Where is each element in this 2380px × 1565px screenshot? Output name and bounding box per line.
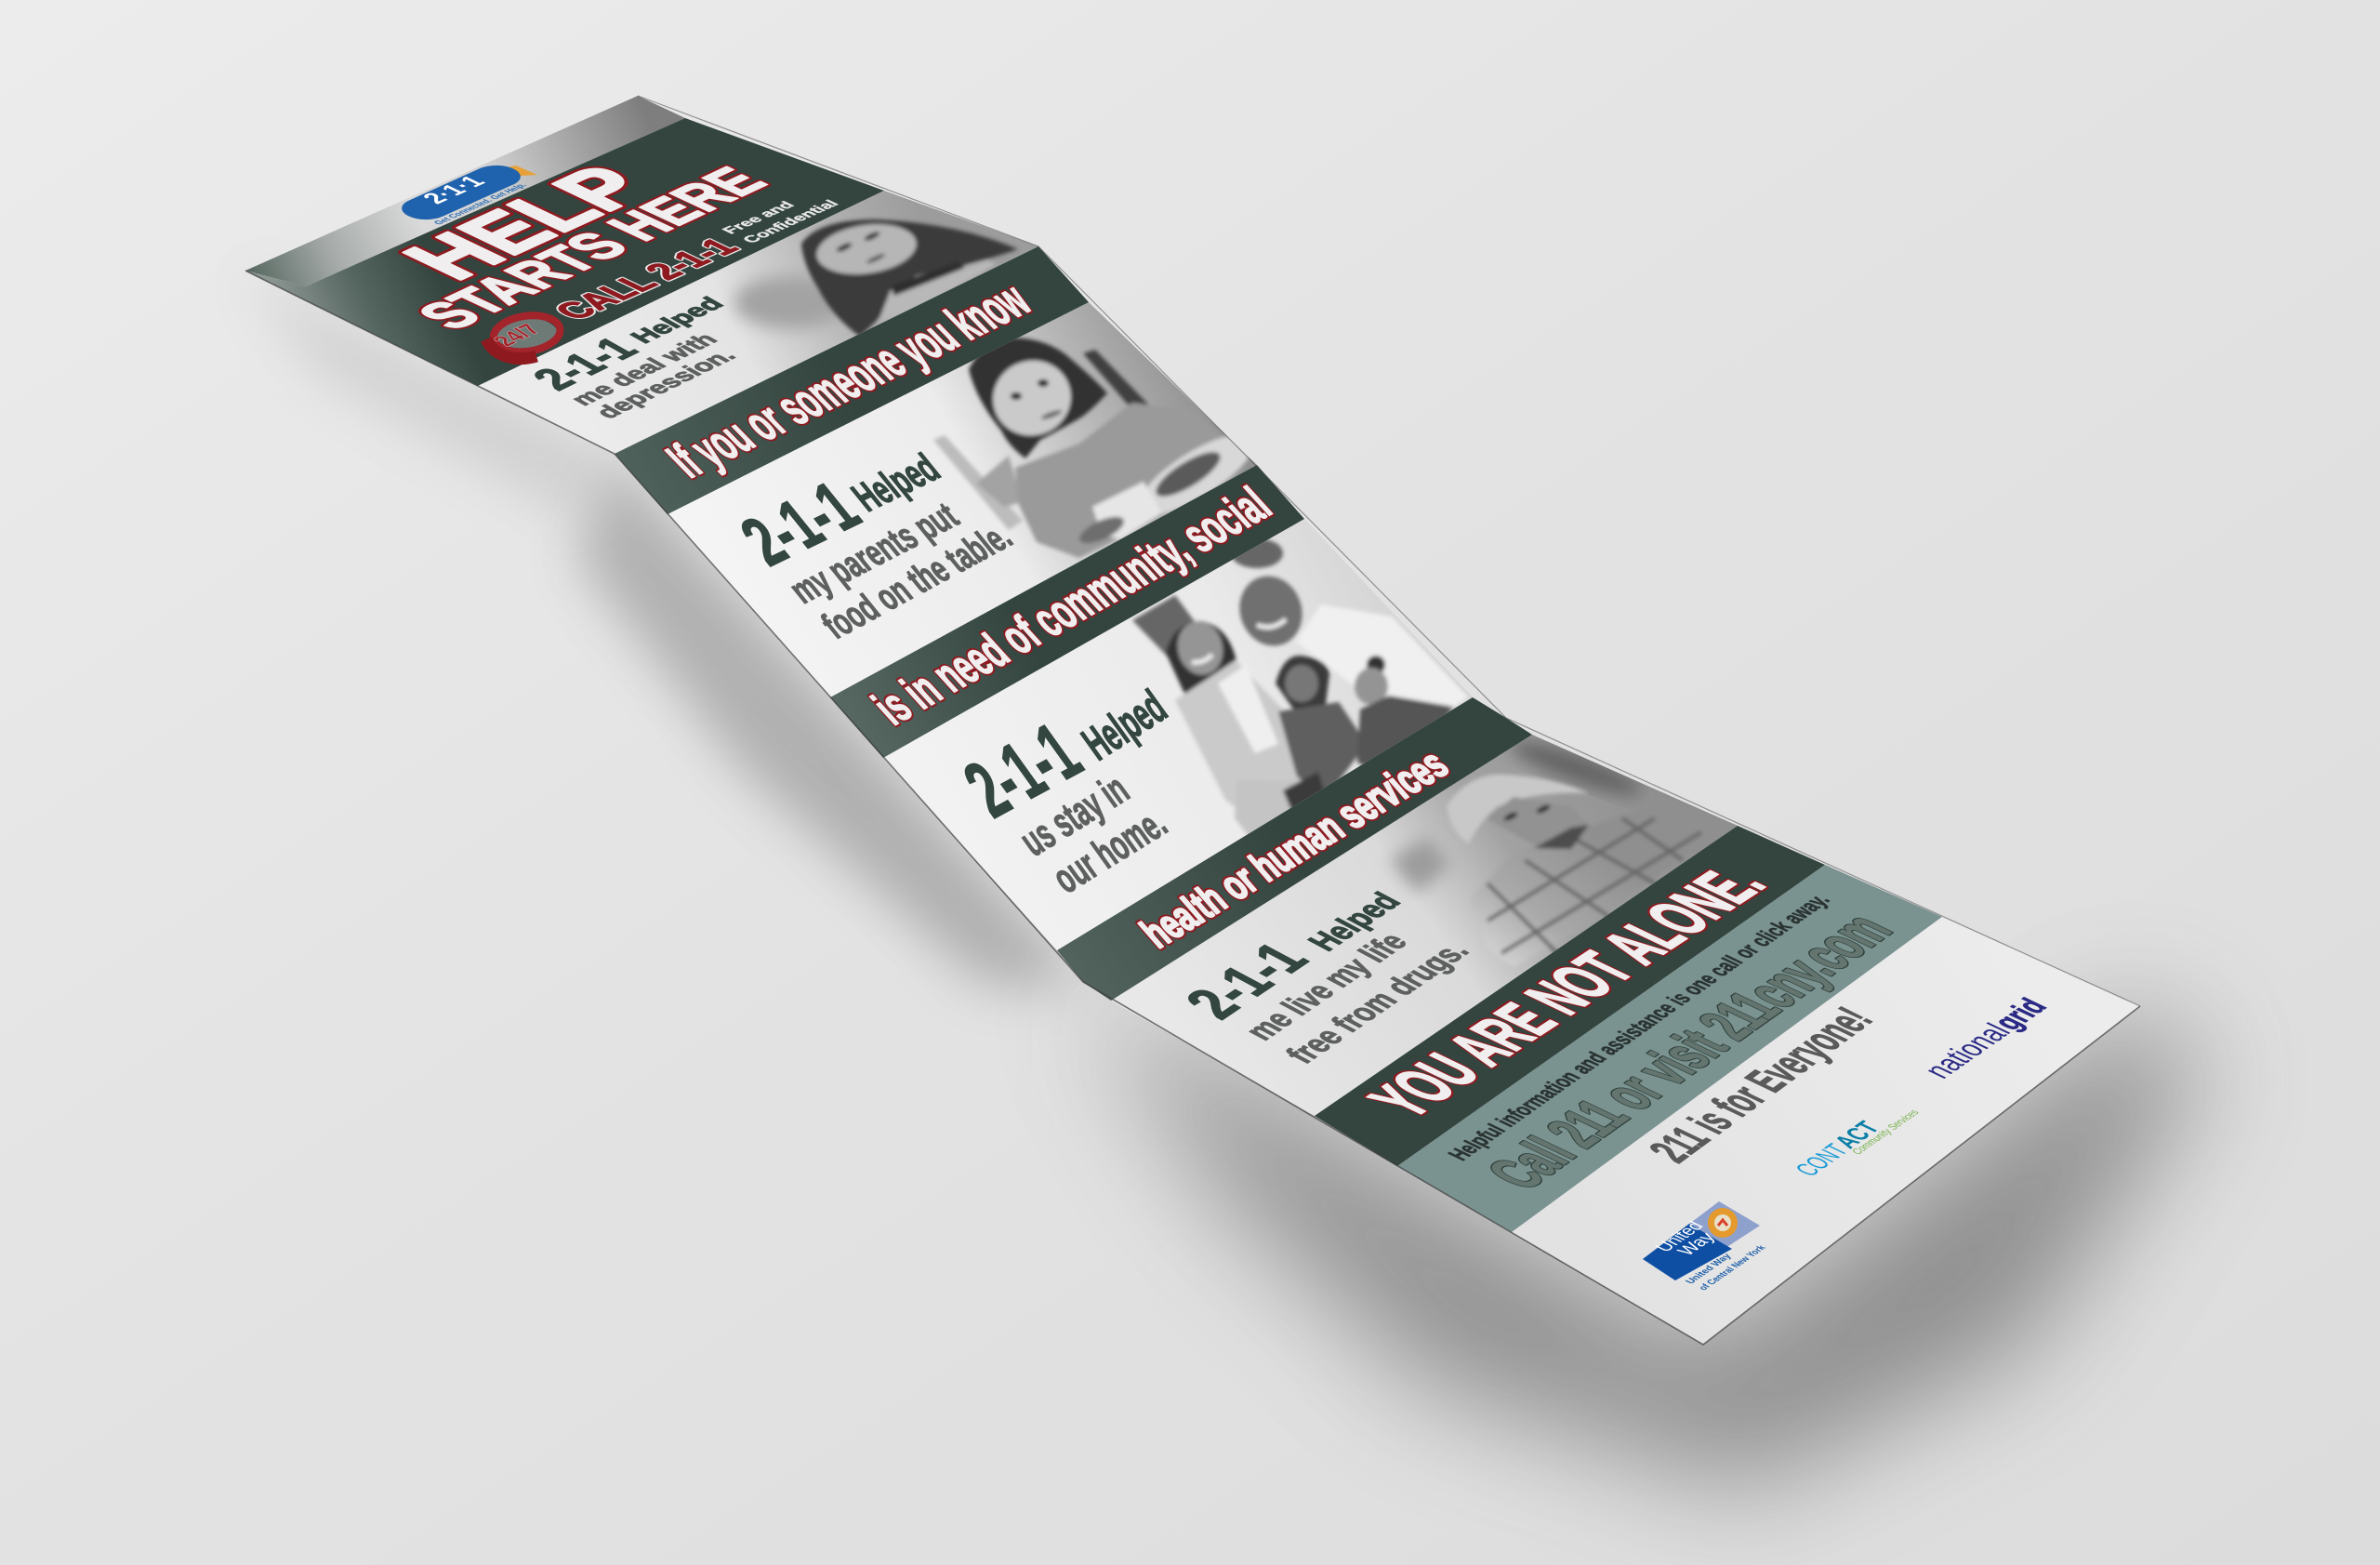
panel: photo section 4, man: [1111, 732, 1748, 1116]
panel: teal section: [1397, 865, 1942, 1232]
panel: band 2: [830, 465, 1304, 758]
heading: HELP: HELP: [381, 154, 672, 290]
folded brochure: [245, 96, 2140, 1345]
text: helped home: our home.: [1044, 799, 1175, 902]
text: 211 is for everyone: 211 is for Everyone!: [1638, 1001, 1884, 1169]
text: is in need of community, social: is in need of community, social: [862, 477, 1283, 736]
text: helped drugs: [1170, 888, 1477, 1068]
logo: national grid: grid: [1985, 994, 2055, 1034]
text: is in need of community, social: [862, 477, 1283, 736]
paper shadows: [245, 271, 2203, 1488]
panel: logo 2-1-1: Get Connected. Get Help.: [432, 182, 530, 226]
panel: band 4: [1315, 826, 1825, 1166]
text: helped depression: depression.: [589, 346, 742, 422]
logo: united way: of Central New York: [1697, 1244, 1769, 1292]
text: health or human services: health or human services: [1129, 742, 1460, 955]
heading: HELP: HELP: [381, 154, 672, 290]
logo: national grid: national: [1915, 1018, 2018, 1082]
logo: contact community services: ACT: [1829, 1118, 1886, 1152]
logo: united way: [1643, 1201, 1769, 1292]
panel: photo section 2, girl: [668, 302, 1265, 697]
heading: you are not alone: YOU ARE NOT ALONE.: [1352, 856, 1782, 1126]
text: helped home: [948, 680, 1176, 902]
heading: STARTS HERE: [403, 160, 781, 337]
text: helped depression: 2-1-1: [522, 331, 649, 396]
icon: 24/7 phone: [486, 312, 562, 359]
text: helped home: us stay in: [1012, 765, 1137, 865]
heading: STARTS HERE: STARTS HERE: [403, 160, 781, 337]
text: helpful information: Helpful information and assistance is one call or click away.: [1442, 891, 1835, 1164]
panel: bottom white section: [1512, 917, 2140, 1345]
text: helped food: 2-1-1: [726, 468, 875, 580]
panel: logo 2-1-1: [392, 161, 537, 226]
text: call 211: Call 211 or visit 211cny.com: [1473, 906, 1907, 1198]
logo: contact community services: CONT: [1790, 1140, 1855, 1180]
heading: you are not alone: YOU ARE NOT ALONE.: [1352, 856, 1782, 1126]
panel: green header: [245, 118, 884, 386]
text: helped food: Helped: [842, 444, 948, 520]
text: if you or someone you know: If you or someone you know: [654, 272, 1043, 487]
text: helped food: food on the table.: [813, 515, 1021, 647]
text: helped drugs: Helped: [1301, 888, 1409, 956]
text: if you or someone you know: [654, 272, 1043, 487]
text: call 211: [1473, 906, 1907, 1198]
icon: 24/7 phone: 24/7: [488, 322, 547, 350]
text: helped depression: [522, 294, 742, 422]
text: is in need of community, social: is in need of community, social: [862, 477, 1283, 736]
logo: contact community services: Community Services: [1848, 1107, 1923, 1156]
panel: photo section 3, family: [883, 519, 1473, 950]
panel: logo 2-1-1: 2·1·1: [416, 172, 491, 207]
heading: you are not alone: [1352, 856, 1782, 1126]
text: helped depression: me deal with: [564, 329, 723, 409]
logo: united way: United: [1651, 1219, 1709, 1254]
logo: contact community services: [1790, 1107, 1923, 1180]
text: helped drugs: free from drugs.: [1278, 937, 1477, 1068]
heading: CALL 2-1-1: CALL 2-1-1: [545, 233, 747, 325]
text: helped home: Helped: [1073, 680, 1176, 770]
panel: photo section 1, woman: [478, 191, 1038, 454]
panel: top grey strip: [245, 96, 685, 286]
logo: united way: Way: [1673, 1229, 1720, 1258]
text: helped home: 2-1-1: [948, 707, 1097, 834]
heading: CALL 2-1-1: CALL 2-1-1: [545, 233, 747, 325]
text: health or human services: [1129, 742, 1460, 955]
text: free and confidential: Confidential: [738, 198, 842, 245]
text: helped drugs: me live my life: [1237, 928, 1416, 1045]
panel: band 1: [615, 246, 1089, 514]
text: free and confidential: Free and: [718, 199, 799, 236]
text: helped food: my parents put: [781, 496, 967, 612]
logo: united way: United Way: [1684, 1252, 1735, 1285]
text: helped food: [726, 444, 1021, 647]
text: if you or someone you know: If you or someone you know: [654, 272, 1043, 487]
text: call 211: Call 211 or visit 211cny.com: [1473, 906, 1907, 1198]
text: helped drugs: 2-1-1: [1170, 934, 1322, 1028]
text: helped depression: Helped: [624, 294, 730, 347]
heading: STARTS HERE: STARTS HERE: [403, 160, 781, 337]
panel: band 3: [1057, 697, 1532, 1001]
text: health or human services: health or human services: [1129, 742, 1460, 955]
